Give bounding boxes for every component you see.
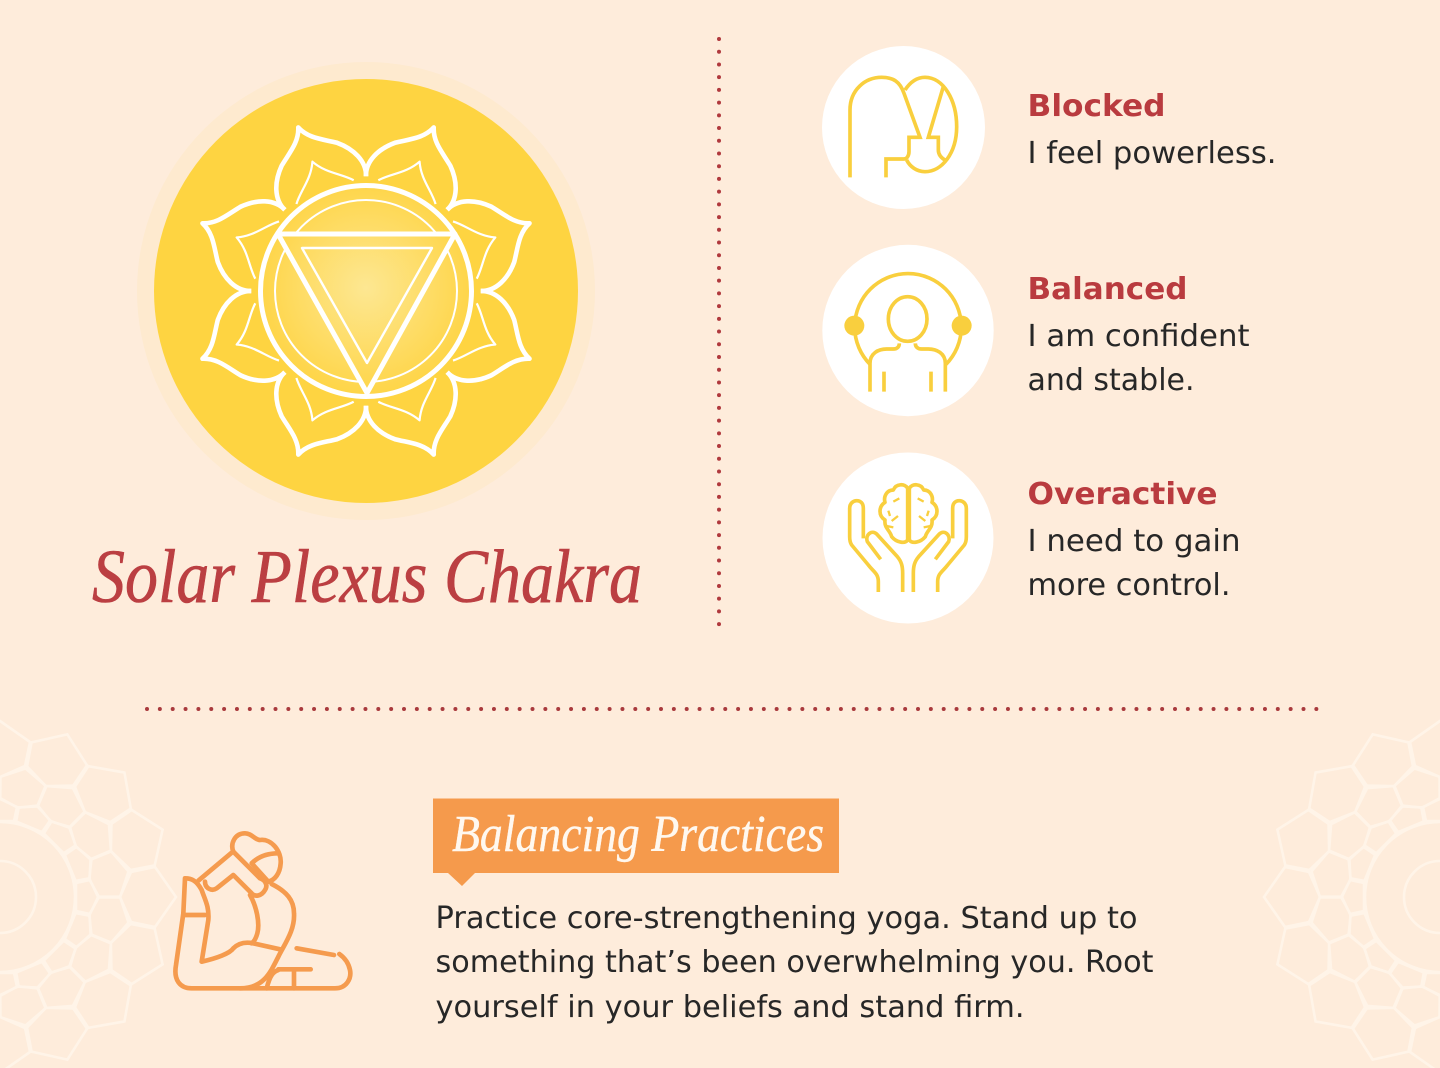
icon: hands holding brain [822, 452, 994, 624]
emblem halo [137, 62, 595, 520]
text: overactive description: more control. [1028, 568, 1230, 603]
text: practice description: yourself in your beliefs and stand firm. [436, 990, 1024, 1025]
label: blocked: Blocked [1028, 89, 1166, 124]
text: blocked description: I feel powerless. [1028, 136, 1276, 171]
chakra emblem [137, 62, 595, 520]
title: Solar Plexus Chakra [92, 535, 642, 619]
icon: blocked head [822, 46, 985, 209]
central rings and triangles [260, 186, 472, 396]
text: practice description: something that’s been overwhelming you. Root [436, 945, 1154, 980]
panel: blocked [822, 46, 1276, 209]
text: balanced description: and stable. [1028, 363, 1194, 398]
banner: balancing practices [433, 798, 839, 886]
text: overactive description: I need to gain [1028, 524, 1240, 559]
banner: balancing practices: Balancing Practices [452, 806, 824, 863]
text: practice description: Practice core-strengthening yoga. Stand up to [436, 901, 1138, 936]
icon: yoga pose [175, 833, 350, 988]
emblem yellow disc [154, 79, 578, 503]
lotus petals [185, 110, 547, 472]
vertical dotted divider [717, 39, 721, 625]
panel: overactive [822, 452, 1240, 624]
background mandala right [1264, 721, 1440, 1068]
label: balanced: Balanced [1028, 272, 1188, 307]
background mandala left [0, 721, 176, 1068]
icon: balanced person [822, 245, 994, 416]
label: overactive: Overactive [1028, 477, 1218, 512]
horizontal dotted divider [147, 707, 1318, 711]
panel: balanced [822, 245, 1250, 416]
text: balanced description: I am confident [1028, 319, 1250, 354]
